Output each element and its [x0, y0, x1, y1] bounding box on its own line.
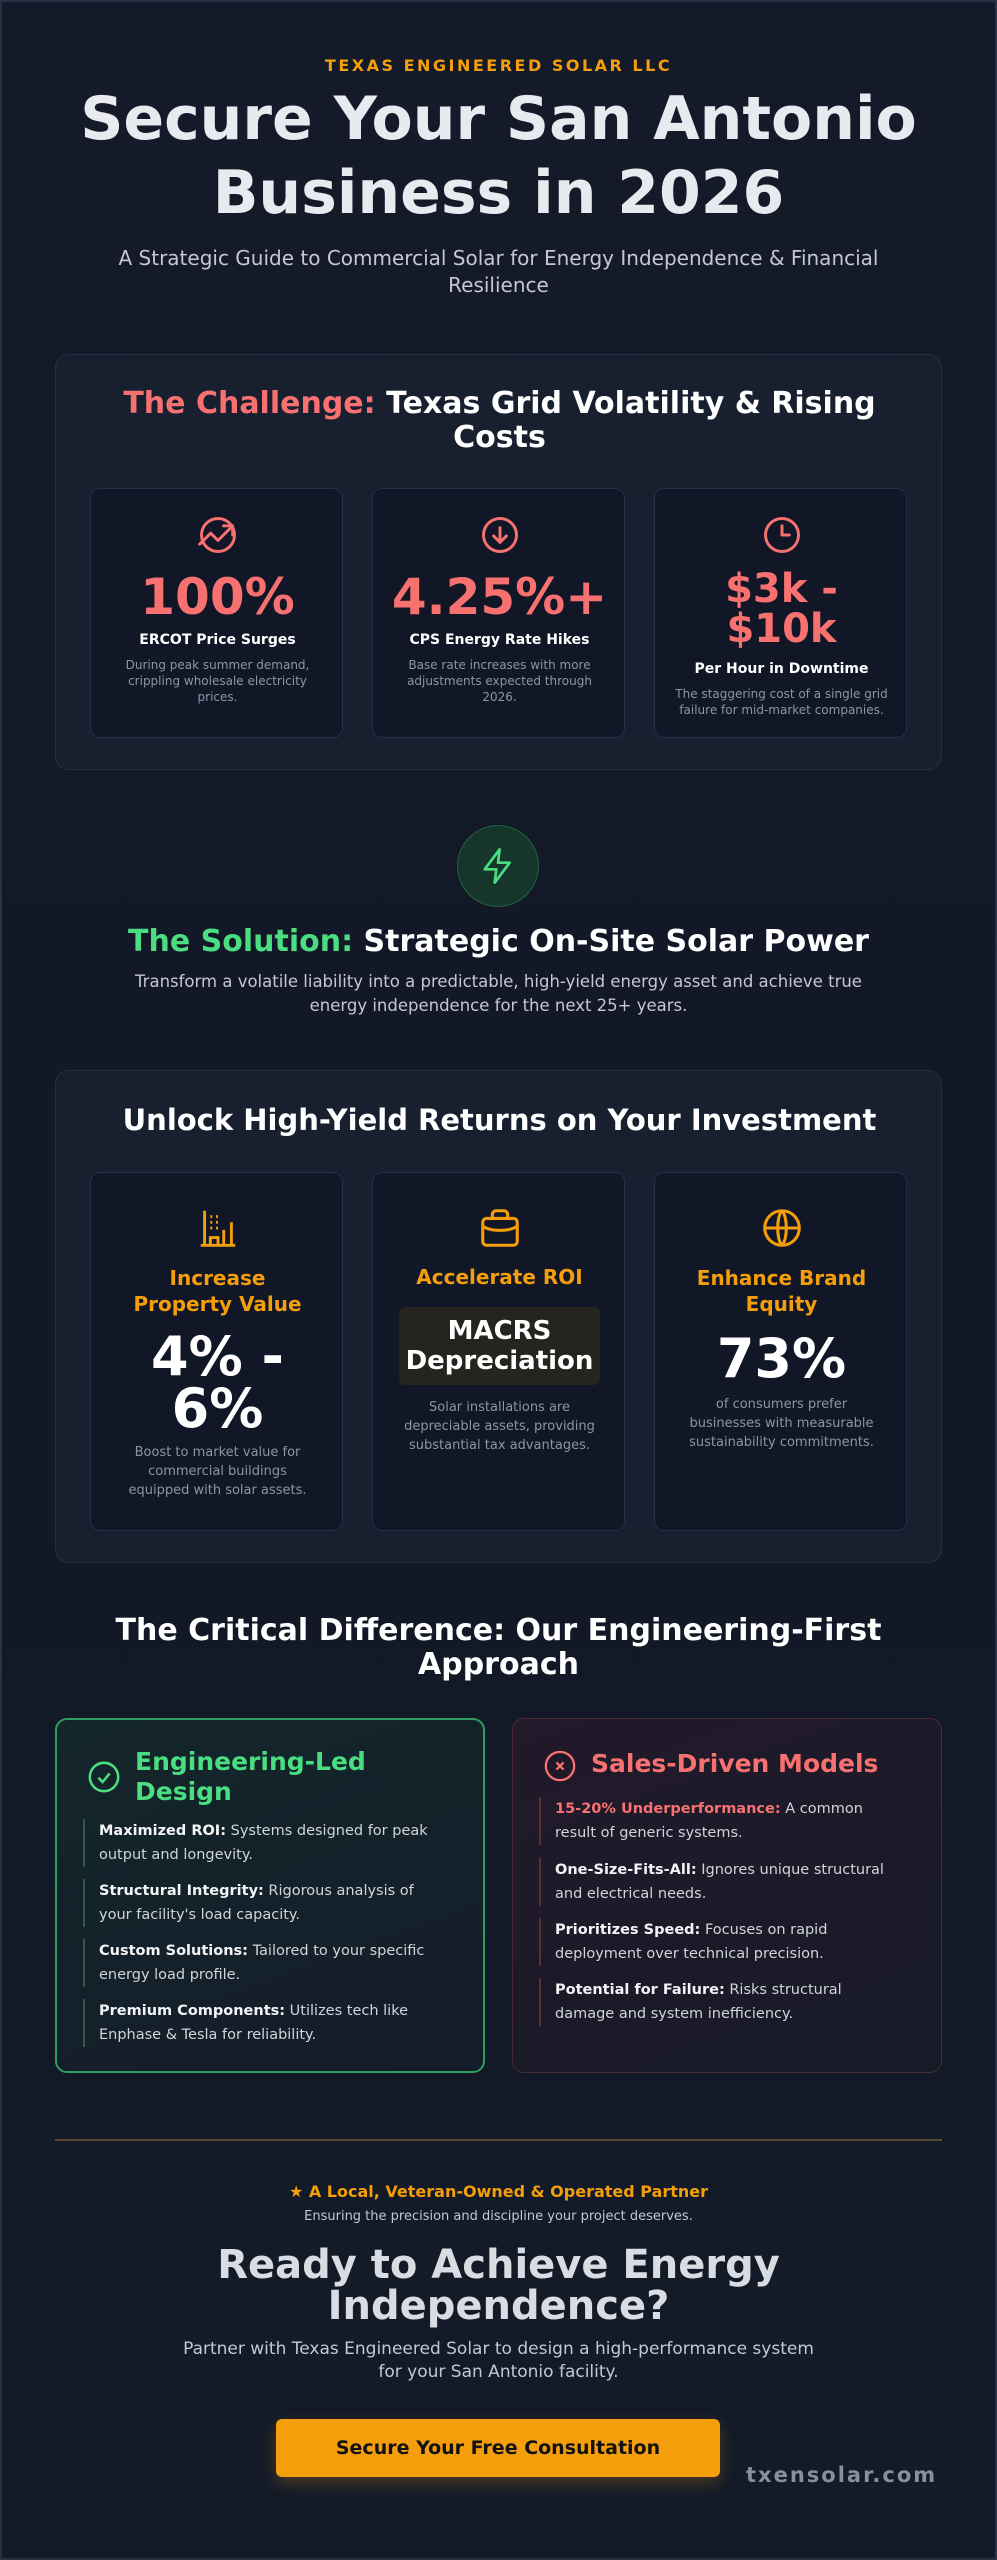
stat: $3k-$10k: [725, 566, 838, 652]
MACRS box: MACRS: [448, 1316, 551, 1346]
title: [133, 1266, 302, 1316]
title: Design: [135, 1777, 232, 1806]
subtitle: A Strategic Guide to Commercial Solar for Energy Independence & Financial Resilience: [118, 246, 878, 297]
icon: globe: [763, 1209, 801, 1247]
website: txensolar.com: [746, 2463, 937, 2487]
card: CPS: [372, 488, 625, 738]
description: During peak summer demand, crippling wholesale electricity prices.: [126, 658, 309, 704]
item: [539, 1918, 884, 1966]
item: Premium Components: Utilizes tech like Enphase & Tesla for reliability.: [99, 2003, 408, 2043]
title: Increase: [170, 1266, 265, 1290]
icon: briefcase: [481, 1209, 519, 1247]
critical difference heading: [116, 1613, 881, 1682]
icon: lightning bolt: [457, 825, 539, 907]
icon: building: [200, 1210, 236, 1247]
item: Potential for Failure: Risks structural damage and system inefficiency.: [555, 1982, 842, 2022]
CTA heading: Independence?: [328, 2283, 669, 2329]
description: Boost to market value for commercial buildings equipped with solar assets.: [128, 1445, 306, 1498]
title: Business in 2026: [213, 158, 784, 228]
CTA description: Partner with Texas Engineered Solar to design a high-performance system for your San Antonio facility.: [183, 2339, 814, 2382]
label: Per Hour in Downtime: [695, 661, 868, 677]
label: ERCOT Price Surges: [139, 632, 296, 648]
stat: 4%-6%: 6%: [172, 1377, 263, 1440]
stat: 4.25%+: 4.25%+: [392, 568, 607, 626]
challenge heading: [123, 386, 876, 455]
veteran badge: ★ A Local, Veteran-Owned & Operated Partner: [289, 2182, 708, 2201]
title: Sales-Driven Models: [591, 1749, 878, 1778]
description: The staggering cost of a single grid failure for mid-market companies.: [675, 687, 888, 717]
stat: 100%: 100%: [140, 568, 295, 626]
challenge heading: Costs: [453, 420, 546, 455]
MACRS box: [399, 1307, 600, 1385]
item: Prioritizes Speed: Focuses on rapid deployment over technical precision.: [555, 1922, 827, 1962]
card: ERCOT: [90, 488, 343, 738]
description: Base rate increases with more adjustments expected through 2026.: [407, 658, 592, 704]
title: [135, 1747, 366, 1806]
item: One-Size-Fits-All: Ignores unique structural and electrical needs.: [555, 1862, 884, 1902]
description: Solar installations are depreciable assets, providing substantial tax advantages.: [404, 1400, 595, 1453]
icon: down arrow circle: [482, 517, 518, 553]
CTA heading: [217, 2242, 780, 2329]
eyebrow: company name: TEXAS ENGINEERED SOLAR LLC: [325, 56, 672, 75]
solution heading: The Solution: Strategic On-Site Solar Power: [128, 924, 869, 959]
item: Custom Solutions: Tailored to your specific energy load profile.: [99, 1943, 424, 1983]
challenge heading: The Challenge: Texas Grid Volatility & Rising: [123, 386, 876, 421]
title: Accelerate ROI: [416, 1265, 583, 1289]
title: [80, 84, 917, 228]
stat: $3k-$10k: $3k -: [725, 566, 838, 612]
CTA button: Secure Your Free Consultation: [336, 2437, 660, 2459]
CTA heading: Ready to Achieve Energy: [217, 2242, 780, 2288]
item: 15-20% Underperformance: A common result of generic systems.: [555, 1801, 863, 1841]
stat: $3k-$10k: $10k: [726, 606, 837, 652]
description: of consumers prefer businesses with measurable sustainability commitments.: [689, 1397, 874, 1450]
critical difference heading: Approach: [418, 1647, 579, 1682]
stat: 4%-6%: 4% -: [151, 1325, 284, 1388]
panel: sales-driven: [512, 1718, 942, 2073]
title: Engineering-Led: [135, 1747, 366, 1776]
solution description: Transform a volatile liability into a predictable, high-yield energy asset and achieve true energy independence for the next 25+ years.: [135, 972, 862, 1015]
stat: 73%: 73%: [717, 1327, 846, 1390]
card: property value: [90, 1172, 343, 1531]
card: brand: [654, 1172, 907, 1531]
MACRS box: Depreciation: [406, 1346, 593, 1376]
stat: 4%-6%: [151, 1325, 284, 1440]
panel: returns: [55, 1070, 942, 1563]
panel: challenge: [55, 354, 942, 770]
icon: x circle: [544, 1750, 576, 1782]
label: CPS Energy Rate Hikes: [409, 632, 590, 648]
veteran subtext: Ensuring the precision and discipline your project deserves.: [304, 2209, 693, 2224]
title: Equity: [746, 1292, 817, 1316]
panel: engineering-led: [55, 1718, 485, 2073]
card: ROI: [372, 1172, 625, 1531]
title: Secure Your San Antonio: [80, 84, 917, 154]
icon: check circle: [88, 1762, 120, 1792]
item: Structural Integrity: Rigorous analysis of your facility's load capacity.: [99, 1883, 414, 1923]
CTA button: [276, 2419, 720, 2477]
item: [539, 1978, 884, 2026]
critical difference heading: The Critical Difference: Our Engineering-First: [116, 1613, 881, 1648]
card: downtime: [654, 488, 907, 738]
icon: trending chart: [198, 517, 236, 553]
icon: clock: [764, 517, 800, 553]
title: [697, 1266, 866, 1316]
item: Maximized ROI: Systems designed for peak output and longevity.: [99, 1823, 428, 1863]
title: Property Value: [133, 1292, 302, 1316]
returns heading: Unlock High-Yield Returns on Your Investment: [123, 1103, 876, 1137]
title: Enhance Brand: [697, 1266, 866, 1290]
